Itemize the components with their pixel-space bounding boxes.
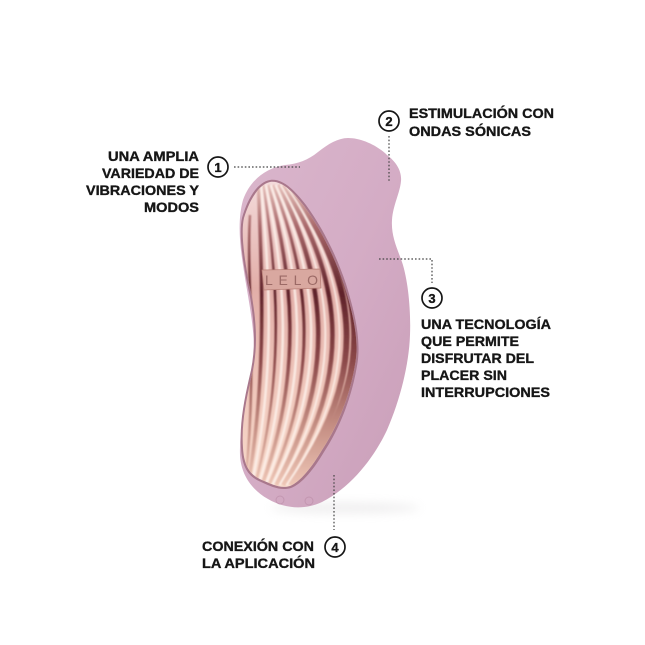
product: pink device [235, 138, 410, 507]
callout 1 text: UNA AMPLIA [108, 148, 199, 164]
callout 1 number: 1 [214, 160, 222, 175]
callout 3 text [421, 316, 551, 400]
callout 1 leader [234, 166, 300, 168]
callout 3 number [422, 288, 442, 308]
callout 4 number [325, 537, 345, 557]
callout 4 text: LA APLICACIÓN [202, 554, 315, 571]
callout 2 leader [388, 136, 390, 181]
callout 3 text: UNA TECNOLOGÍA [421, 316, 551, 332]
callout 2 text [409, 104, 554, 139]
callout 4 number: 4 [331, 540, 339, 555]
callout 1 number [208, 157, 228, 177]
device body [240, 138, 410, 507]
floor shadow [270, 503, 420, 513]
callout 4 [202, 475, 345, 571]
callout 2 number: 2 [385, 114, 393, 129]
logo badge [262, 269, 321, 290]
callout 1 text: MODOS [144, 199, 199, 215]
callout 1 text: VIBRACIONES Y [86, 182, 200, 198]
callout 3 text: PLACER SIN [421, 367, 507, 383]
callout 2 [379, 104, 554, 181]
callout 3 text: DISFRUTAR DEL [421, 350, 534, 366]
callout 4 text [202, 537, 315, 571]
callout 2 text: ESTIMULACIÓN CON [409, 104, 554, 121]
callout 1 [86, 148, 300, 215]
logo badge: LELO [265, 272, 318, 288]
dark ribs [245, 185, 355, 485]
light ribs [252, 185, 340, 485]
callout 2 text: ONDAS SÓNICAS [409, 122, 531, 139]
callout 1 text: VARIEDAD DE [102, 165, 199, 181]
control icons [276, 496, 313, 505]
callout 4 text: CONEXIÓN CON [202, 537, 314, 554]
callout 3 text: INTERRUPCIONES [421, 384, 550, 400]
callout 3 [379, 259, 551, 400]
callout 4 leader [333, 475, 335, 530]
callout 1 text [86, 148, 200, 215]
metal plate with ribs [242, 182, 356, 487]
callout 3 leader [379, 259, 432, 283]
callout 3 number: 3 [428, 291, 436, 306]
callout 3 text: QUE PERMITE [421, 333, 519, 349]
plate base [242, 182, 356, 487]
plate rim [241, 180, 359, 489]
callout 2 number [379, 111, 399, 131]
